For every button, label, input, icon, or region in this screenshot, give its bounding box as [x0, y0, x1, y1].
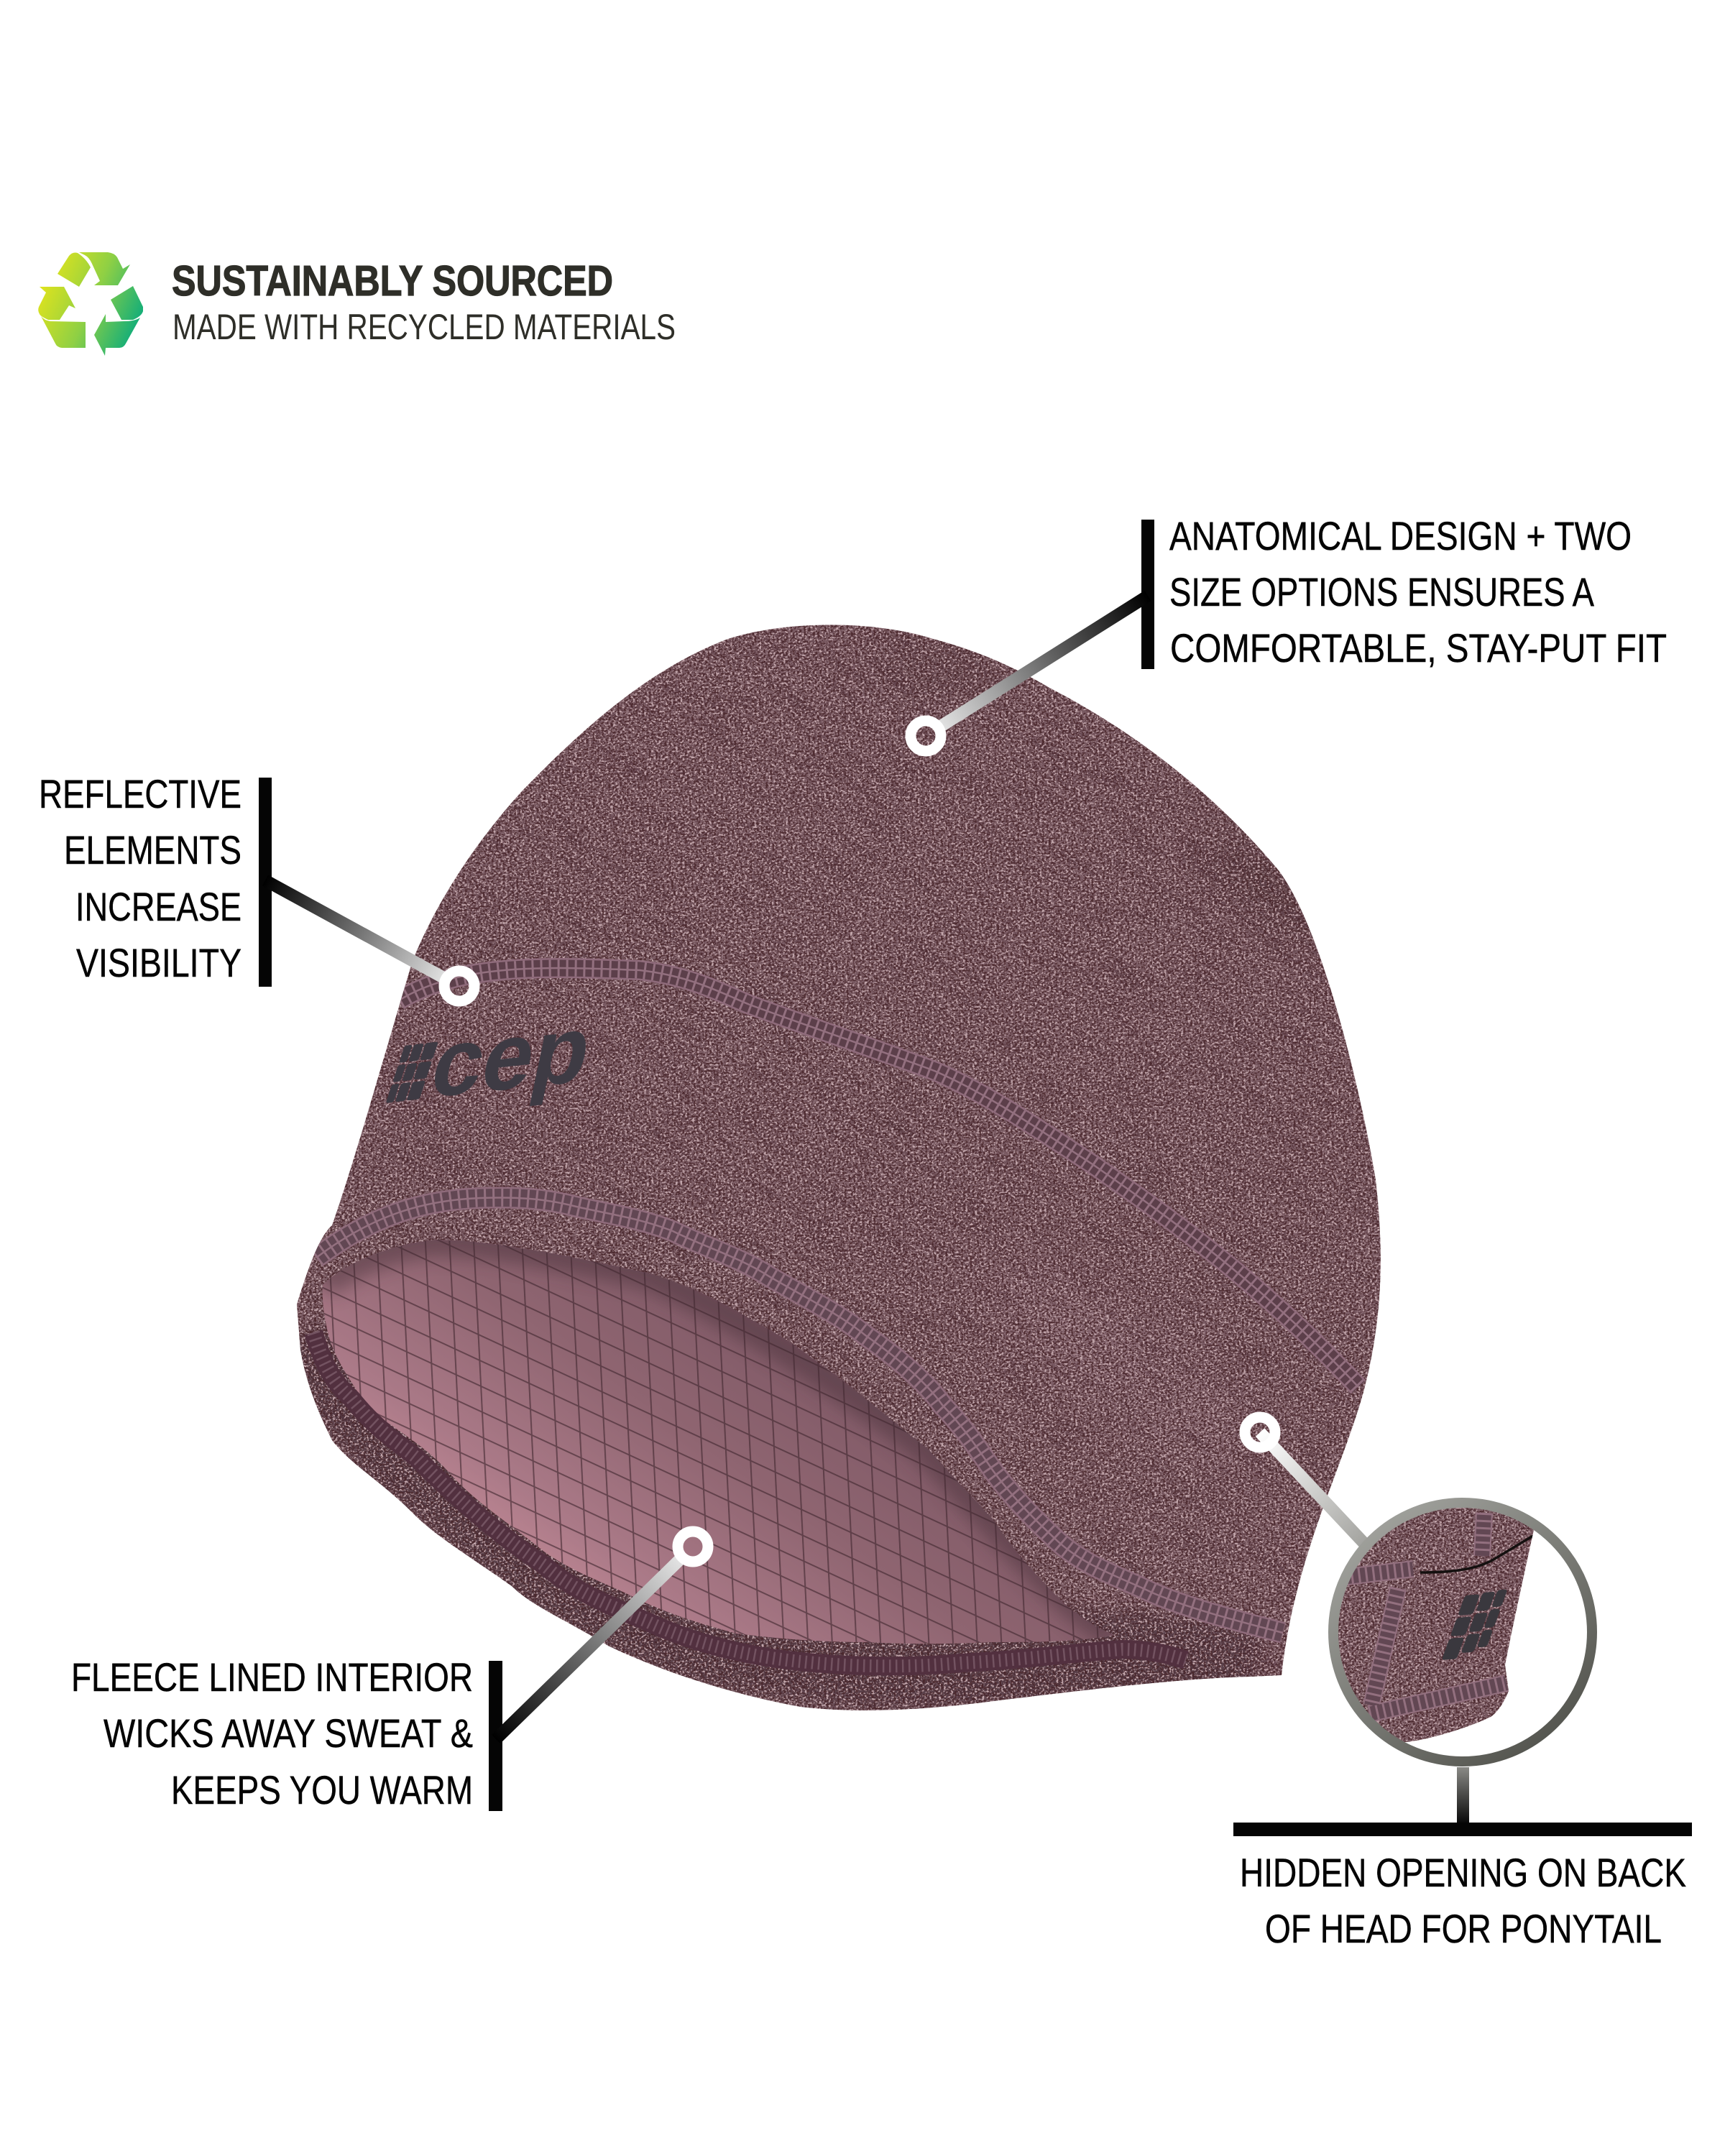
fleece lined interior [322, 1240, 1116, 1644]
callout text: VISIBILITY [76, 940, 242, 985]
callout text [1169, 513, 1667, 671]
leader line [496, 1557, 683, 1739]
callout: reflective elements [39, 771, 474, 1001]
bottom rim seam [313, 1332, 1186, 1666]
upper reflective seam [399, 968, 1358, 1387]
inset: zoomed hat back [1322, 1495, 1593, 1762]
callout text [1240, 1850, 1686, 1951]
callout text: SIZE OPTIONS ENSURES A [1169, 569, 1595, 614]
callout text: FLEECE LINED INTERIOR [71, 1654, 473, 1700]
infographic: beanie hat features [38, 252, 1692, 1943]
marker dot [911, 721, 941, 751]
inset ring [1333, 1503, 1592, 1761]
callout text: KEEPS YOU WARM [171, 1767, 473, 1812]
dark fibres [288, 611, 1402, 1725]
leader line [265, 880, 446, 979]
leader line [938, 596, 1148, 728]
product image: beanie hat [297, 625, 1381, 1710]
marker dot [1245, 1417, 1275, 1447]
callout text [39, 771, 242, 985]
hat outer knit [297, 625, 1381, 1710]
marker dot [444, 971, 474, 1001]
callout text: REFLECTIVE [39, 771, 242, 816]
leader line [1260, 1432, 1369, 1549]
heading: sustainably sourced: SUSTAINABLY SOURCED [172, 257, 613, 305]
callout: anatomical design [911, 513, 1667, 751]
logo: cep on hat [386, 995, 601, 1118]
inset logo mark [1442, 1589, 1508, 1660]
shading under rim and folds [313, 647, 1350, 1677]
callout: hidden ponytail opening [1233, 1417, 1692, 1951]
leader bar [489, 1661, 502, 1811]
diagonal mottling [298, 625, 1381, 1710]
subheading: recycled materials: MADE WITH RECYCLED MATERIALS [172, 307, 676, 347]
logo mark [386, 1041, 438, 1103]
callout text: ELEMENTS [64, 827, 242, 872]
leader bar [259, 778, 272, 987]
callout text: INCREASE [75, 884, 242, 929]
callout text: WICKS AWAY SWEAT & [104, 1710, 473, 1756]
icon: recycling arrows [38, 252, 143, 356]
callout: fleece lined interior [71, 1531, 708, 1812]
lower brim seam [316, 1197, 1283, 1633]
leader bar [1233, 1823, 1692, 1836]
leader bar [1141, 520, 1154, 669]
callout text: ANATOMICAL DESIGN + TWO [1169, 513, 1632, 558]
callout text [71, 1654, 473, 1812]
logo wordmark: cep [423, 995, 601, 1118]
connector stem [1457, 1767, 1469, 1823]
marker dot [678, 1531, 708, 1562]
badge: sustainably sourced [38, 252, 676, 356]
light fibres [288, 611, 1402, 1725]
